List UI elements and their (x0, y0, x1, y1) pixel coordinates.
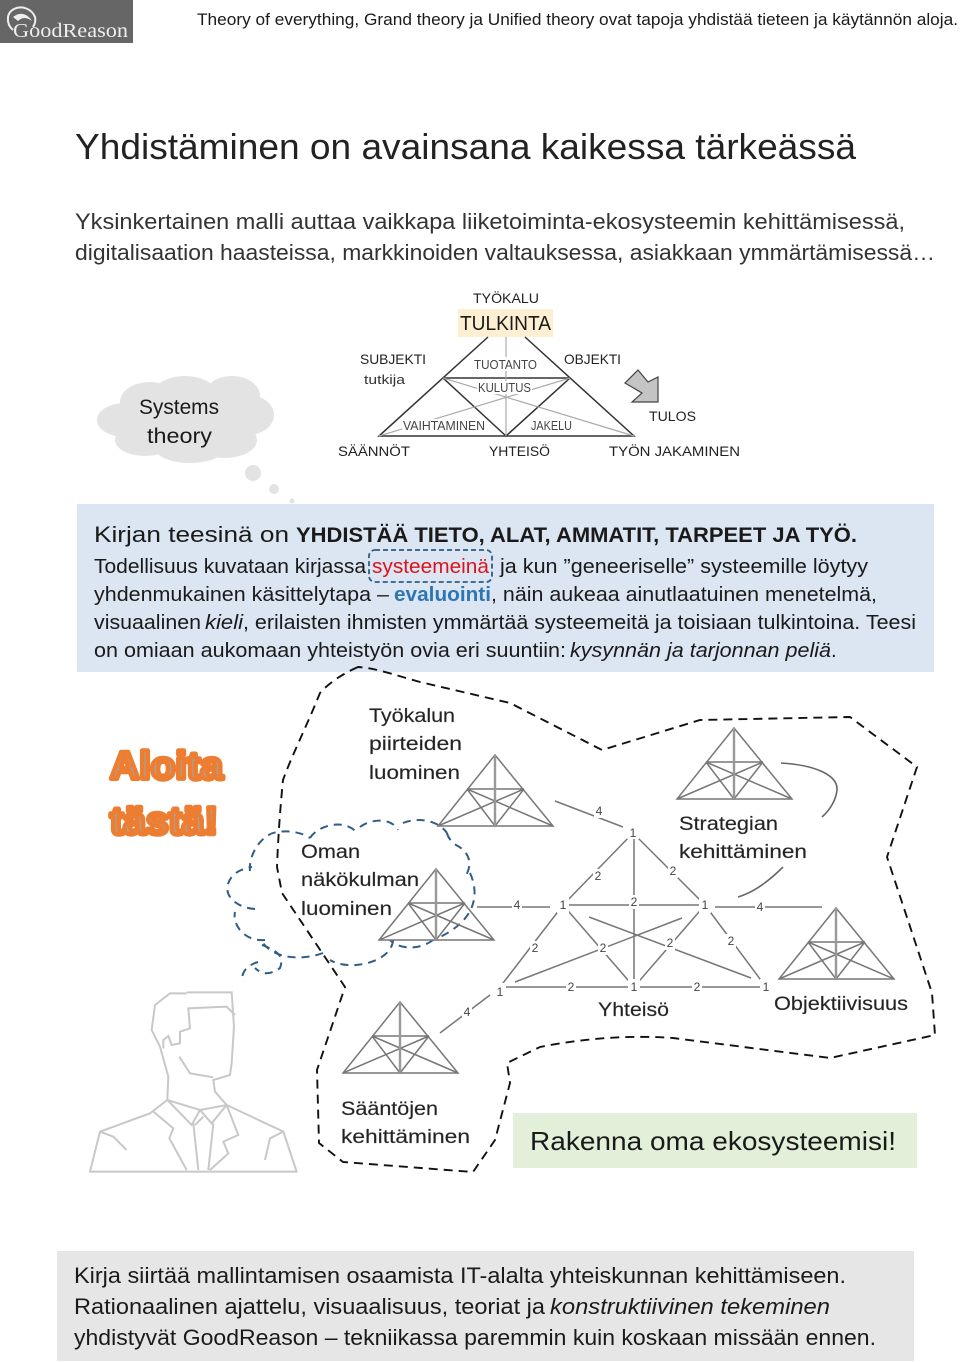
activity triangle diagram: TUOTANTO (474, 358, 537, 372)
diagram labels: Työkalun (369, 705, 455, 727)
central community network: 4 (464, 1005, 471, 1019)
diagram labels: Sääntöjen (341, 1098, 438, 1120)
activity triangle diagram (338, 289, 740, 459)
curved arrows around strategy (738, 763, 837, 897)
triangle: Objektiivisuus (779, 908, 894, 979)
diagram labels: kehittäminen (679, 841, 807, 863)
diagram labels: luominen (301, 898, 392, 920)
ecosystem dashed outline (277, 667, 935, 1172)
callout: Aloita tästä (110, 745, 223, 843)
panel: book thesis: . (831, 639, 837, 662)
panel: book thesis: ja kun ”geneeriselle” systeemille löytyy (499, 555, 869, 578)
panel: conclusion (57, 1251, 914, 1361)
activity triangle diagram: SUBJEKTI (360, 351, 426, 367)
panel: book thesis: Kirjan teesinä on (94, 522, 289, 547)
triangle: Oman näkökulman luominen (379, 869, 494, 940)
diagram labels: luominen (369, 762, 460, 784)
activity triangle diagram: tutkija (364, 372, 406, 387)
activity triangle diagram: TYÖN JAKAMINEN (609, 442, 740, 459)
diagram labels: näkökulman (301, 869, 419, 891)
panel: book thesis: kysynnän ja tarjonnan peliä (570, 639, 831, 662)
callout: Aloita tästä: Aloita (110, 745, 223, 788)
diagram labels: kehittäminen (341, 1126, 470, 1148)
central community network: 4 (514, 898, 521, 912)
subtitle (75, 209, 935, 265)
activity triangle diagram: OBJEKTI (564, 351, 621, 367)
panel: book thesis: , erilaisten ihmisten ymmärtää systeemeitä ja toisiaan tulkintoina. Teesi (243, 611, 916, 634)
central community network: 2 (694, 980, 701, 994)
header text: Theory of everything, Grand theory ja Unified theory ovat tapoja yhdistää tieteen ja käytännön aloja. (197, 11, 958, 29)
central community network: 2 (600, 941, 607, 955)
central community network: 2 (595, 869, 602, 883)
subtitle: Yksinkertainen malli auttaa vaikkapa liiketoiminta-ekosysteemin kehittämisessä, (75, 209, 905, 234)
panel: book thesis: , näin aukeaa ainutlaatuinen menetelmä, (491, 583, 877, 606)
central community network: 2 (728, 934, 735, 948)
title: Yhdistäminen on avainsana kaikessa tärkeässä (75, 126, 857, 167)
triangle: Työkalun piirteiden luominen (438, 755, 553, 826)
triangle: Strategian kehittäminen (677, 728, 792, 799)
panel: book thesis: YHDISTÄÄ TIETO, ALAT, AMMATIT, TARPEET JA TYÖ. (296, 522, 857, 547)
activity triangle diagram: KULUTUS (478, 381, 531, 395)
central community network (440, 801, 822, 1033)
central community network: 1 (763, 980, 770, 994)
callout: Aloita tästä: tästä! (110, 800, 218, 843)
central community network: 4 (596, 804, 603, 818)
central community network: 2 (532, 941, 539, 955)
diagram labels: Yhteisö (598, 999, 669, 1021)
central community network: 1 (630, 826, 637, 840)
activity triangle diagram: TYÖKALU (473, 289, 539, 306)
panel: book thesis: yhdenmukainen käsittelytapa – (94, 583, 390, 606)
thought cloud: Systems theory (97, 376, 294, 504)
panel: book thesis: visuaalinen (94, 611, 201, 634)
panel: book thesis: Todellisuus kuvataan kirjassa (94, 555, 367, 578)
panel: conclusion: Rationaalinen ajattelu, visuaalisuus, teoriat ja (74, 1294, 546, 1319)
central community network: 1 (631, 980, 638, 994)
triangle: Sääntöjen kehittäminen (343, 1002, 458, 1073)
activity triangle diagram: JAKELU (531, 419, 572, 433)
central community network: 1 (702, 898, 709, 912)
panel: book thesis (77, 504, 934, 672)
central community network: 2 (667, 936, 674, 950)
subtitle: digitalisaation haasteissa, markkinoiden valtauksessa, asiakkaan ymmärtämisessä… (75, 240, 935, 265)
activity triangle diagram: TULOS (649, 408, 696, 424)
panel: book thesis: kieli (205, 611, 245, 634)
central community network: 1 (560, 898, 567, 912)
callout: Rakenna oma ekosysteemisi: Rakenna oma ekosysteemisi! (530, 1126, 896, 1156)
panel: book thesis: evaluointi (394, 583, 491, 606)
activity triangle diagram: TULKINTA (460, 313, 552, 335)
logo: GoodReason (13, 20, 128, 42)
own viewpoint thought cloud (227, 820, 475, 982)
activity triangle diagram: VAIHTAMINEN (403, 419, 485, 433)
panel: conclusion: konstruktiivinen tekeminen (550, 1294, 830, 1319)
highlighted word: systeemeinä (369, 550, 492, 582)
thought cloud: Systems theory: Systems (139, 396, 219, 419)
central community network: 4 (757, 900, 764, 914)
logo (0, 0, 133, 43)
central community network: 1 (497, 985, 504, 999)
diagram labels (301, 705, 908, 1148)
thought cloud: Systems theory: theory (147, 425, 213, 448)
callout: Rakenna oma ekosysteemisi (513, 1113, 917, 1168)
panel: book thesis: systeemeinä (372, 555, 490, 578)
panel: book thesis: on omiaan aukomaan yhteistyön ovia eri suuntiin: (94, 639, 566, 662)
diagram labels: piirteiden (369, 733, 462, 755)
panel: conclusion: yhdistyvät GoodReason – tekniikassa paremmin kuin koskaan missään ennen. (74, 1325, 876, 1350)
diagram labels: Objektiivisuus (774, 993, 908, 1015)
central community network: 2 (670, 864, 677, 878)
diagram labels: Strategian (679, 813, 778, 835)
central community network: 2 (568, 980, 575, 994)
central community network: 2 (631, 895, 638, 909)
panel: conclusion: Kirja siirtää mallintamisen osaamista IT-alalta yhteiskunnan kehittämiseen. (74, 1263, 846, 1288)
icon: businessman outline (90, 992, 297, 1172)
activity triangle diagram: SÄÄNNÖT (338, 442, 410, 459)
diagram labels: Oman (301, 841, 360, 863)
activity triangle diagram: YHTEISÖ (489, 442, 550, 459)
